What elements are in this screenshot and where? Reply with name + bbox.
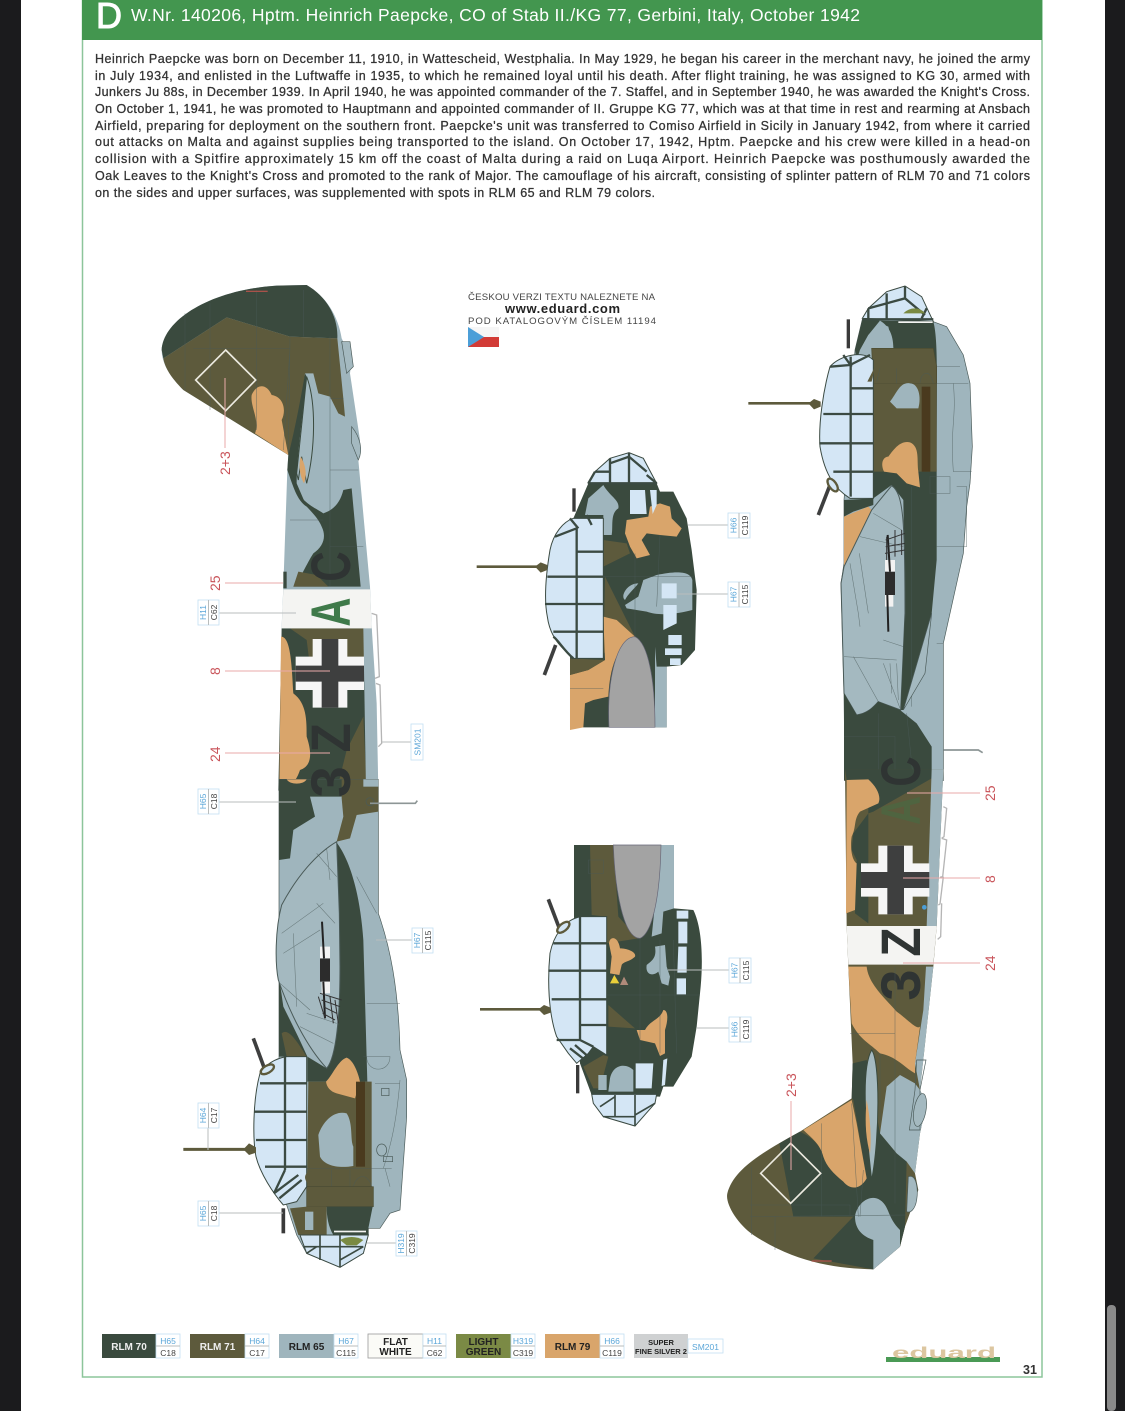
right side stencil numbers: 8 xyxy=(982,875,998,883)
side view colour callouts and stencil numbers: C17 xyxy=(209,1107,219,1123)
Czech version note: www.eduard.com xyxy=(504,301,620,316)
top view colour callouts: H66 xyxy=(728,517,738,533)
swatch: super fine silver xyxy=(634,1334,723,1358)
swatch: flat white: WHITE xyxy=(379,1347,412,1358)
side view colour callouts and stencil numbers: C18 xyxy=(209,1205,219,1221)
side view colour callouts and stencil numbers: C319 xyxy=(407,1233,417,1254)
right side stencil numbers: 2+3 xyxy=(783,1073,799,1097)
eduard logo: eduard xyxy=(892,1345,996,1362)
aircraft: right side view: C xyxy=(870,756,932,787)
side view colour callouts and stencil numbers: C62 xyxy=(209,604,219,620)
side view colour callouts and stencil numbers: H65 xyxy=(198,793,208,809)
swatch: RLM 79: RLM 79 xyxy=(555,1342,591,1353)
aircraft: left side view xyxy=(162,285,417,1267)
top view colour callouts: C119 xyxy=(740,515,750,535)
swatch: RLM 65: H67 xyxy=(338,1336,354,1346)
side view colour callouts and stencil numbers: H319 xyxy=(396,1233,406,1254)
swatch: RLM 70: RLM 70 xyxy=(111,1342,147,1353)
swatch: light green: C319 xyxy=(513,1348,533,1358)
side view colour callouts and stencil numbers: H65 xyxy=(198,1205,208,1221)
swatch: light green: LIGHT xyxy=(468,1337,498,1348)
swatch: RLM 65 xyxy=(279,1334,358,1358)
swatch: light green: H319 xyxy=(513,1336,533,1346)
biography text block: out attacks on Malta and against supplies being transported to the island. On October 17, 1942, Hptm. Paepcke and his crew were killed in a head-on xyxy=(95,135,1030,149)
aircraft: left side view: 3 xyxy=(299,766,362,797)
Czech version note: POD KATALOGOVÝM ČÍSLEM 11194 xyxy=(468,316,657,327)
aircraft: right side view: 3 xyxy=(869,970,932,1001)
right side stencil numbers: 24 xyxy=(982,955,998,971)
header banner: W.Nr. 140206, Hptm. Heinrich Paepcke, CO of Stab II./KG 77, Gerbini, Italy, October 1942 xyxy=(131,5,860,25)
swatch: RLM 65: RLM 65 xyxy=(289,1342,325,1353)
side view colour callouts and stencil numbers: C18 xyxy=(209,793,219,809)
biography text block: Oak Leaves to the Knight's Cross and promoted to the rank of Major. The camouflage of his aircraft, consisting of splinter pattern of RLM 70 and 71 colors xyxy=(95,169,1030,183)
aircraft: left side view: Z xyxy=(300,723,363,752)
top view colour callouts: C115 xyxy=(740,584,750,604)
biography text block: Airfield, preparing for deployment on the southern front. Paepcke's unit was transferred to Comiso Airfield in Sicily in January 1942, from where it carried xyxy=(95,119,1030,133)
side view colour callouts and stencil numbers: H11 xyxy=(198,605,208,620)
biography text block: on the sides and upper surfaces, was supplemented with spots in RLM 65 and RLM 79 colors. xyxy=(95,186,655,200)
swatch: super fine silver: SM201 xyxy=(692,1342,719,1352)
aircraft: right side view xyxy=(727,286,983,1269)
underside view colour callouts: C119 xyxy=(741,1019,751,1039)
top view colour callouts xyxy=(677,513,750,607)
aircraft: nose top view xyxy=(477,453,697,730)
swatch: RLM 79: C119 xyxy=(602,1348,622,1358)
biography text block xyxy=(95,52,1031,200)
header banner xyxy=(82,0,1042,40)
swatch: RLM 71 xyxy=(190,1334,269,1358)
swatch: RLM 79 xyxy=(545,1334,624,1358)
side view colour callouts and stencil numbers: 24 xyxy=(207,746,223,762)
top view colour callouts: H67 xyxy=(728,586,738,602)
side view colour callouts and stencil numbers: 8 xyxy=(207,667,223,675)
biography text block: Heinrich Paepcke was born on December 11, 1910, in Wattescheid, Westphalia. In May 1929, he began his career in the merchant navy, he joined the army xyxy=(95,52,1031,66)
aircraft: left side view: C xyxy=(300,551,362,582)
underside view colour callouts: H66 xyxy=(730,1021,740,1037)
aircraft: nose underside view xyxy=(480,845,702,1126)
swatch: RLM 71: RLM 71 xyxy=(200,1342,236,1353)
Czech version note: ČESKOU VERZI TEXTU NALEZNETE NA xyxy=(468,292,656,303)
biography text block: Junkers Ju 88s, in December 1939. In April 1940, he was appointed commander of the 7. Staffel, and in September 1940, he was awarded the Knight's Cross. xyxy=(95,85,1030,99)
side view colour callouts and stencil numbers: C115 xyxy=(423,930,433,950)
swatch: RLM 65: C115 xyxy=(336,1348,356,1358)
scrollbar thumb xyxy=(1107,1305,1116,1411)
eduard logo xyxy=(886,1345,1000,1362)
swatch: RLM 70 xyxy=(102,1334,180,1358)
swatch: super fine silver: FINE SILVER 2 xyxy=(635,1347,687,1356)
side view colour callouts and stencil numbers: H67 xyxy=(412,932,422,948)
swatch: flat white xyxy=(368,1334,446,1358)
swatch: flat white: FLAT xyxy=(383,1337,408,1348)
biography text block: collision with a Spitfire approximately 15 km off the coast of Malta during a raid on Luqa Airport. Heinrich Paepcke was posthumously awarded the xyxy=(95,152,1030,166)
biography text block: in July 1934, and enlisted in the Luftwaffe in 1935, to which he remained loyal until his death. After flight training, he was assigned to KG 30, armed with xyxy=(95,69,1030,83)
side view colour callouts and stencil numbers: 25 xyxy=(207,575,223,591)
swatch: RLM 70: H65 xyxy=(160,1336,176,1346)
Czech version note xyxy=(468,292,657,347)
aircraft: left side view: A xyxy=(301,598,363,627)
biography text block: On October 1, 1941, he was promoted to Hauptmann and appointed commander of II. Gruppe KG 77, which was at that time in rest and rearming at Ansbach xyxy=(95,102,1030,116)
underside view colour callouts xyxy=(668,958,751,1042)
right side stencil numbers xyxy=(783,785,998,1170)
swatch: light green: GREEN xyxy=(466,1347,501,1358)
swatch: light green xyxy=(456,1334,535,1358)
side view colour callouts and stencil numbers: H64 xyxy=(198,1107,208,1123)
swatch: flat white: C62 xyxy=(427,1348,443,1358)
swatch: RLM 71: C17 xyxy=(249,1348,265,1358)
underside view colour callouts: H67 xyxy=(730,962,740,978)
swatch: super fine silver: SUPER xyxy=(648,1338,675,1347)
right side stencil numbers: 25 xyxy=(982,785,998,801)
side view colour callouts and stencil numbers: 2+3 xyxy=(217,451,233,475)
side view colour callouts and stencil numbers xyxy=(198,378,433,1256)
paint legend xyxy=(102,1334,723,1358)
underside view colour callouts: C115 xyxy=(741,960,751,980)
aircraft: right side view: Z xyxy=(870,928,933,957)
aircraft: right side view: A xyxy=(871,796,933,825)
swatch: flat white: H11 xyxy=(427,1336,442,1346)
swatch: RLM 79: H66 xyxy=(604,1336,620,1346)
swatch: RLM 70: C18 xyxy=(160,1348,176,1358)
swatch: RLM 71: H64 xyxy=(249,1336,265,1346)
page number: 31 xyxy=(1023,1363,1037,1377)
side view colour callouts and stencil numbers: SM201 xyxy=(412,728,422,755)
